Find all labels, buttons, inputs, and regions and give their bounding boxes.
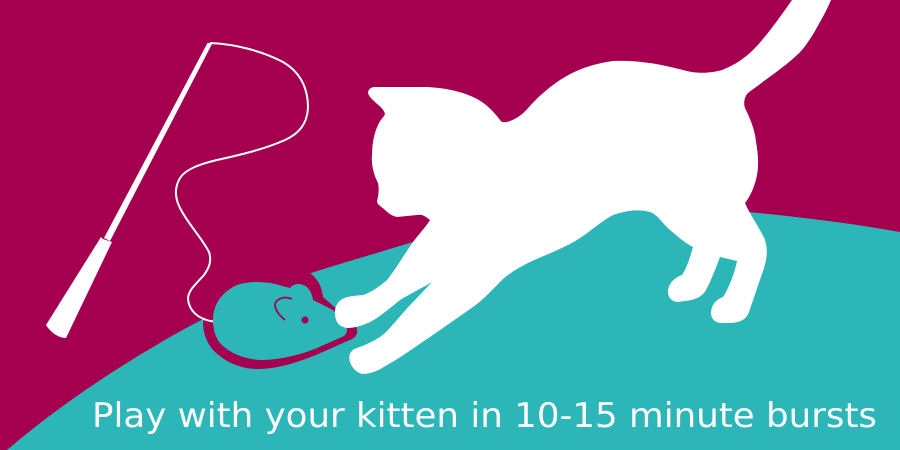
wand handle [46,237,112,338]
caption text: Play with your kitten in 10-15 minute bursts [92,396,877,436]
mouse body [213,282,347,360]
wand rod [104,43,212,241]
mouse eye [302,316,308,324]
teal floor curve [7,207,900,450]
icon: toy mouse [203,273,357,369]
icon: wand string [176,43,308,322]
mouse crimson outline [203,273,357,369]
icon: wand rod and handle [46,43,212,338]
mouse ear line [275,298,292,320]
icon: white kitten silhouette [335,0,831,374]
